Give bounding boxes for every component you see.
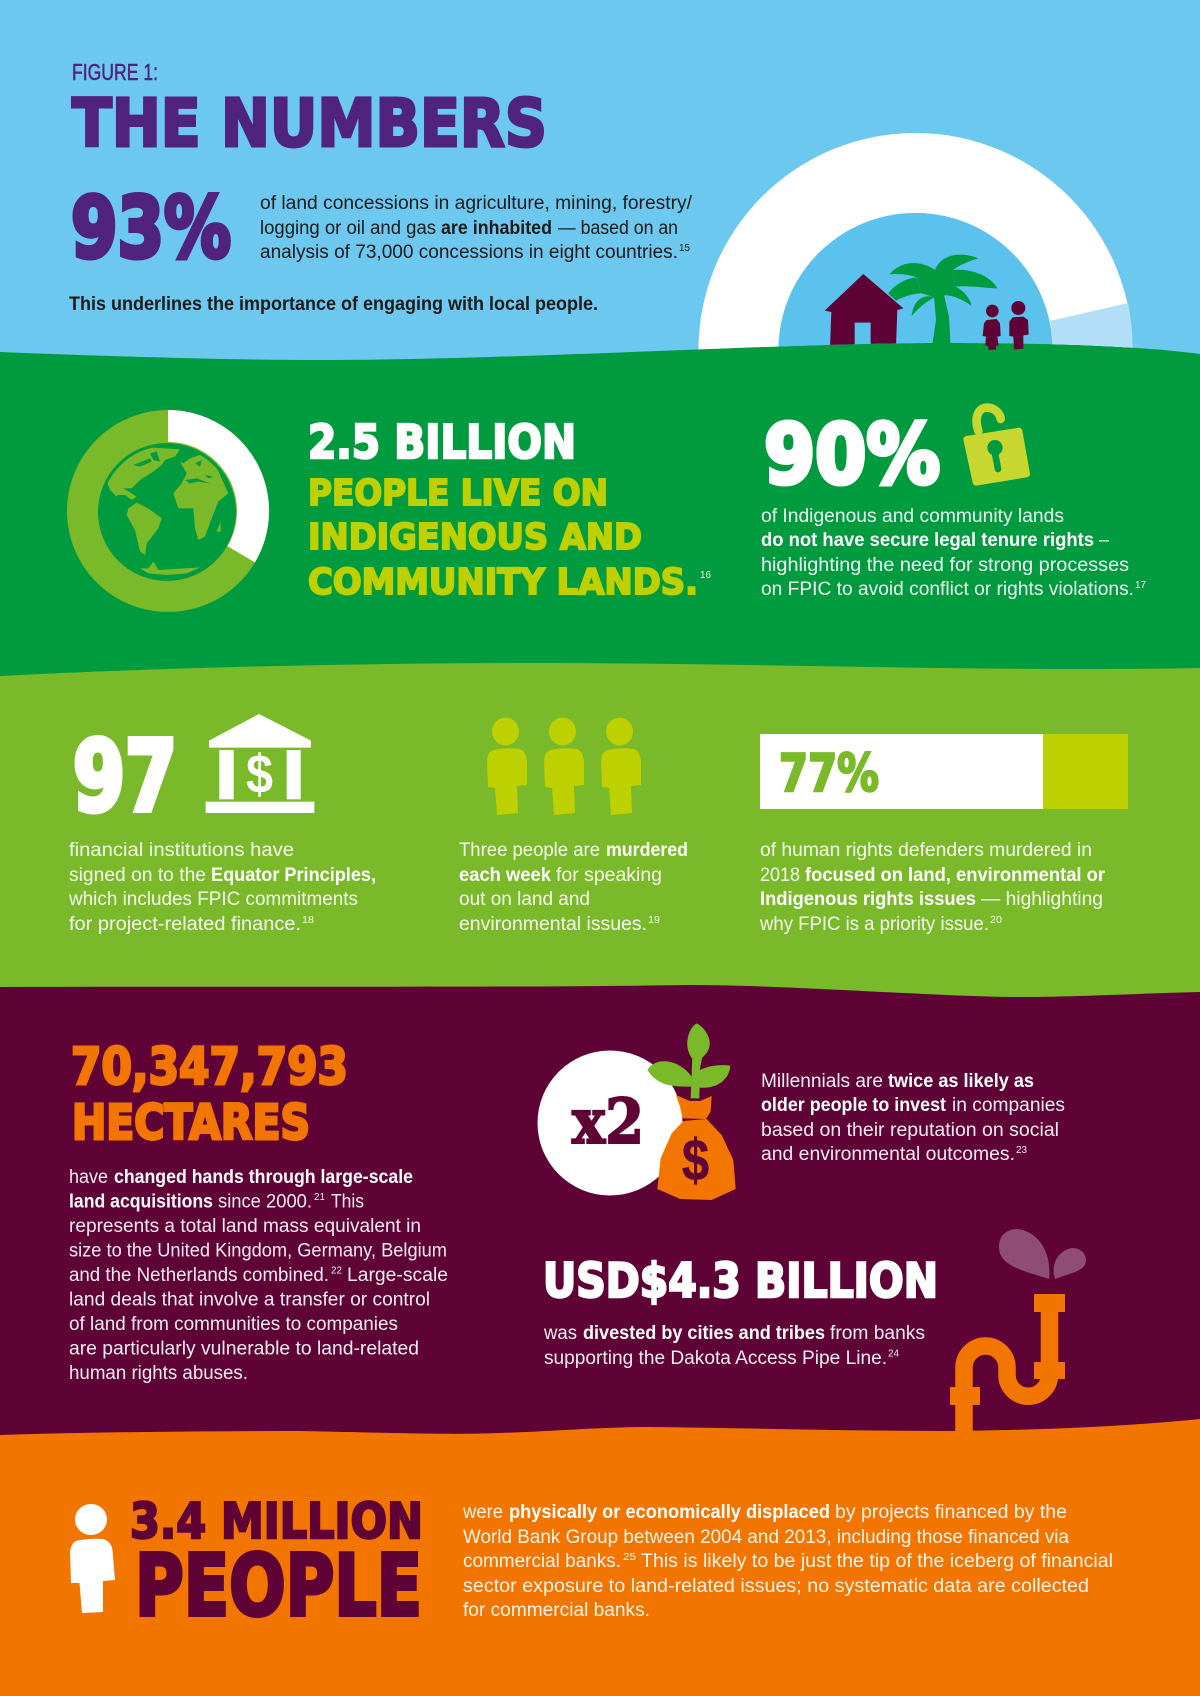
text: 90 percent description: of Indigenous and community lands [761,506,1064,527]
text: divested description: was [543,1323,577,1344]
icon: x2 circle: x2 [572,1085,644,1158]
icon: person [70,1504,115,1613]
chart: arc gauge [698,133,1133,365]
text: human rights defenders: 20 [990,915,1002,926]
icon: bank: $ [246,743,273,805]
text: 93 percent description: of land concessions in agriculture, mining, forestry/ [260,193,693,214]
text: equator principles: financial institutions have [69,840,294,861]
text: land acquisitions: land deals that involve a transfer or control [69,1290,430,1310]
text: land acquisitions: 22 [331,1266,342,1276]
text: human rights defenders: why FPIC is a priority issue. [759,914,989,935]
text: millennials description: based on their reputation on social [761,1120,1059,1141]
icon: bank [206,714,314,813]
panel: USD 4.3 billion [543,1229,1086,1436]
text: land acquisitions: This [331,1192,364,1212]
stat: 70,347,793 hectares [71,1038,348,1151]
heading: people live on indigenous and community lands: COMMUNITY LANDS. [308,562,698,603]
stat: 93 percent: 93% [71,179,231,277]
text: land acquisitions: size to the United Kingdom, Germany, Belgium [69,1240,447,1262]
text: displacement description: were [462,1502,503,1523]
text: land acquisitions: of land from communities to companies [69,1314,398,1335]
text: displacement description [462,1502,1113,1621]
background: sky [0,0,1200,400]
text: divested description: supporting the Dakota Access Pipe Line. [544,1348,887,1369]
panel: 3.4 million people [70,1493,1113,1636]
text: 93 percent description: are inhabited [441,218,552,239]
panel: millennials x2 [538,1023,1065,1200]
text: human rights defenders [759,840,1106,935]
text: murders description: out on land and [459,889,590,910]
text: murders description [459,840,688,935]
text: land acquisitions: have [69,1167,108,1188]
text: equator principles: for project-related finance. [69,914,301,935]
text: equator principles: Equator Principles, [211,865,376,886]
text: 93 percent description: — based on an [558,218,678,239]
text: land acquisitions: and the Netherlands combined. [69,1265,329,1286]
text: murders description: each week [459,865,551,886]
icon: open padlock [967,408,1027,482]
text: local people note: This underlines the importance of engaging with local people. [69,294,598,315]
background: dark green band [0,343,1200,700]
text: land acquisitions: changed hands through large-scale [114,1167,413,1188]
icon: money bag with sprout [647,1023,736,1200]
panel: header and 93 percent [69,59,693,315]
text: millennials description: Millennials are [761,1071,883,1092]
stat: 3.4 million people: 3.4 MILLION [130,1493,423,1550]
title: THE NUMBERS [72,85,547,162]
text: murders description: murdered [606,840,688,861]
chart: donut with globe [67,410,269,612]
text: land acquisitions: are particularly vulnerable to land-related [69,1338,419,1360]
text: land acquisitions: human rights abuses. [69,1363,248,1384]
text: millennials description: older people to invest [761,1095,947,1116]
text: 93 percent description [260,193,693,263]
text: human rights defenders: of human rights defenders murdered in [760,840,1092,861]
text: millennials description: and environmental outcomes. [761,1144,1015,1165]
text: millennials description: 23 [1016,1145,1027,1156]
text: equator principles: signed on to the [69,865,206,886]
text: 90 percent description: highlighting the need for strong processes [761,555,1129,576]
text: divested description: 24 [888,1348,899,1360]
text: 90 percent description: on FPIC to avoid conflict or rights violations. [761,579,1134,600]
stat: 70,347,793 hectares: HECTARES [72,1095,310,1151]
text: displacement description: for commercial banks. [463,1600,650,1621]
text: human rights defenders: — highlighting [981,889,1103,910]
text: 93 percent description: analysis of 73,000 concessions in eight countries. [260,242,678,263]
background: light green band [0,663,1200,1020]
text: human rights defenders: focused on land, environmental or [805,865,1106,886]
stat: 2.5 billion: 2.5 BILLION [308,415,576,469]
text: divested description: divested by cities and tribes [583,1323,825,1344]
panel: 97 financial institutions [68,714,376,935]
text: equator principles: 18 [302,915,314,926]
footnote 16: 16 [700,570,711,581]
text: 90 percent description [761,506,1146,600]
text: land acquisitions: Large-scale [347,1265,448,1286]
illustration: rainbow arc with village [698,133,1133,365]
text: displacement description: World Bank Group between 2004 and 2013, including those financed via [463,1527,1069,1548]
text: murders description: Three people are [459,840,600,861]
text: 93 percent description: logging or oil and gas [260,218,436,239]
panel: hectares [69,1038,448,1384]
text: murders description: for speaking [556,865,662,886]
stat: 3.4 million people [130,1493,423,1636]
text: human rights defenders: Indigenous rights issues [760,889,976,910]
text: displacement description: This is likely to be just the tip of the iceberg of financial [641,1551,1113,1572]
panel: 77 percent [759,734,1128,935]
text: human rights defenders: 2018 [760,865,800,886]
stat: 70,347,793 hectares: 70,347,793 [71,1038,348,1097]
stat: 90 percent: 90% [764,408,940,503]
stat: USD 4.3 billion: USD$4.3 BILLION [543,1254,938,1309]
text: 90 percent description: do not have secure legal tenure rights [761,530,1094,551]
text: millennials description: in companies [952,1095,1065,1116]
text: 90 percent description: – [1099,530,1109,551]
text: displacement description: commercial banks. [463,1551,621,1572]
text: murders description: 19 [648,915,660,926]
text: millennials description: twice as likely as [888,1071,1034,1092]
text: equator principles [68,840,376,935]
text: millennials description [761,1071,1065,1165]
stat: 97: 97 [73,720,177,833]
text: equator principles: which includes FPIC commitments [68,889,358,910]
icon: x2 circle [538,1050,682,1196]
panel: 90 percent [761,408,1146,600]
icon: money bag with sprout: $ [682,1128,709,1193]
heading: people live on indigenous and community lands [308,473,698,603]
text: divested description [543,1323,925,1369]
text: displacement description: sector exposure to land-related issues; no systematic data are collected [463,1576,1089,1597]
label: figure 1: FIGURE 1: [72,59,158,85]
icon: leaking pipe [950,1229,1086,1436]
chart: 77 percent bar [760,734,1128,809]
text: land acquisitions: 21 [314,1192,325,1203]
background: orange band [0,1419,1200,1696]
icon: two people [983,301,1029,350]
heading: people live on indigenous and community lands: PEOPLE LIVE ON [308,473,608,514]
chart: 77 percent bar: 77% [779,744,879,804]
text: displacement description: physically or economically displaced [509,1502,830,1523]
background: maroon band [0,985,1200,1460]
text: land acquisitions: since 2000. [218,1192,312,1212]
text: land acquisitions: land acquisitions [69,1192,213,1212]
heading: people live on indigenous and community lands: INDIGENOUS AND [308,517,642,558]
icon: palm tree [888,255,997,347]
icon: house [825,274,903,347]
text: land acquisitions [69,1167,448,1384]
text: 90 percent description: 17 [1135,580,1146,591]
stat: 3.4 million people: PEOPLE [135,1537,422,1636]
panel: three people murdered [459,718,688,935]
text: displacement description: 25 [623,1552,637,1563]
panel: 2.5 billion [67,410,711,612]
text: land acquisitions: represents a total land mass equivalent in [69,1216,421,1237]
text: displacement description: by projects financed by the [835,1502,1067,1523]
text: divested description: from banks [830,1323,925,1344]
icon: three people [487,718,641,815]
text: 93 percent description: 15 [679,243,690,254]
text: murders description: environmental issues. [459,914,647,935]
